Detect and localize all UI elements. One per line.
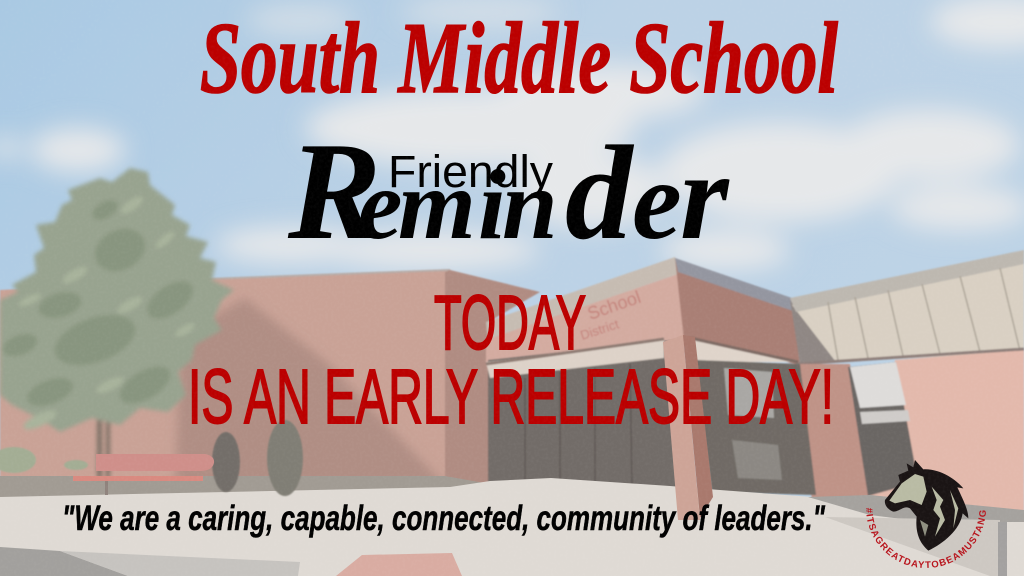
line: TODAY: TODAY bbox=[434, 280, 586, 366]
canopy silhouette bbox=[0, 168, 234, 432]
lighter shaded paving bbox=[825, 517, 1000, 576]
sign lettering: School bbox=[585, 287, 643, 324]
recessed glass doors bbox=[488, 340, 680, 495]
lighter foliage bbox=[17, 193, 197, 433]
Reminder: r bbox=[680, 128, 730, 266]
logo: mustang: #ITSAGREATDAYTOBEAMUSTANG bbox=[866, 508, 986, 568]
brick side of entry bbox=[796, 364, 870, 500]
entry doors bbox=[695, 360, 816, 495]
trunk bbox=[97, 420, 102, 478]
right pink brick wall bbox=[860, 350, 1024, 520]
centre brick facade with signage bbox=[486, 274, 686, 366]
Reminder: emin bbox=[358, 149, 558, 260]
canopy underside bbox=[486, 340, 664, 378]
ground and walkway bbox=[0, 335, 1024, 576]
Friendly: Friendly bbox=[388, 146, 554, 197]
bench seat bbox=[73, 476, 203, 481]
shrubs bbox=[0, 420, 303, 496]
Reminder: d bbox=[565, 119, 635, 268]
sign lettering bbox=[578, 287, 643, 343]
logo: mustang bbox=[866, 460, 986, 568]
bench back bbox=[96, 454, 214, 471]
tree bbox=[0, 168, 234, 478]
upper right panels bbox=[792, 258, 1024, 362]
road bottom-left bbox=[0, 547, 128, 576]
brick tower right face bbox=[675, 258, 800, 365]
roofline left bbox=[180, 270, 450, 280]
main message bbox=[188, 280, 834, 440]
icon: horse head bbox=[885, 460, 968, 551]
centre parapet bbox=[486, 257, 678, 340]
heading: Friendly Reminder bbox=[287, 114, 730, 269]
left brick wall bbox=[0, 270, 490, 500]
dark shaded triangle bbox=[790, 300, 836, 364]
tower roof edge bbox=[675, 258, 796, 312]
dark shadow band by the wall bbox=[808, 495, 1024, 530]
shrubs and bench bbox=[0, 420, 303, 496]
red crosswalk patch bbox=[336, 553, 462, 576]
entry canopy bbox=[692, 340, 798, 362]
Reminder: e bbox=[632, 139, 682, 263]
mulch strip bbox=[0, 476, 490, 500]
grey post bbox=[998, 522, 1007, 576]
pillar base bbox=[663, 335, 700, 520]
darker foliage bbox=[0, 196, 199, 411]
wall shadow of the tree bbox=[175, 298, 445, 485]
darker corner pillar bbox=[445, 270, 540, 490]
Reminder: R bbox=[287, 114, 381, 269]
paved ground bbox=[0, 478, 1024, 576]
sign lettering: District bbox=[578, 316, 621, 343]
school building bbox=[0, 250, 1024, 520]
side window bbox=[848, 362, 918, 496]
curved hashtag text bbox=[866, 508, 986, 568]
